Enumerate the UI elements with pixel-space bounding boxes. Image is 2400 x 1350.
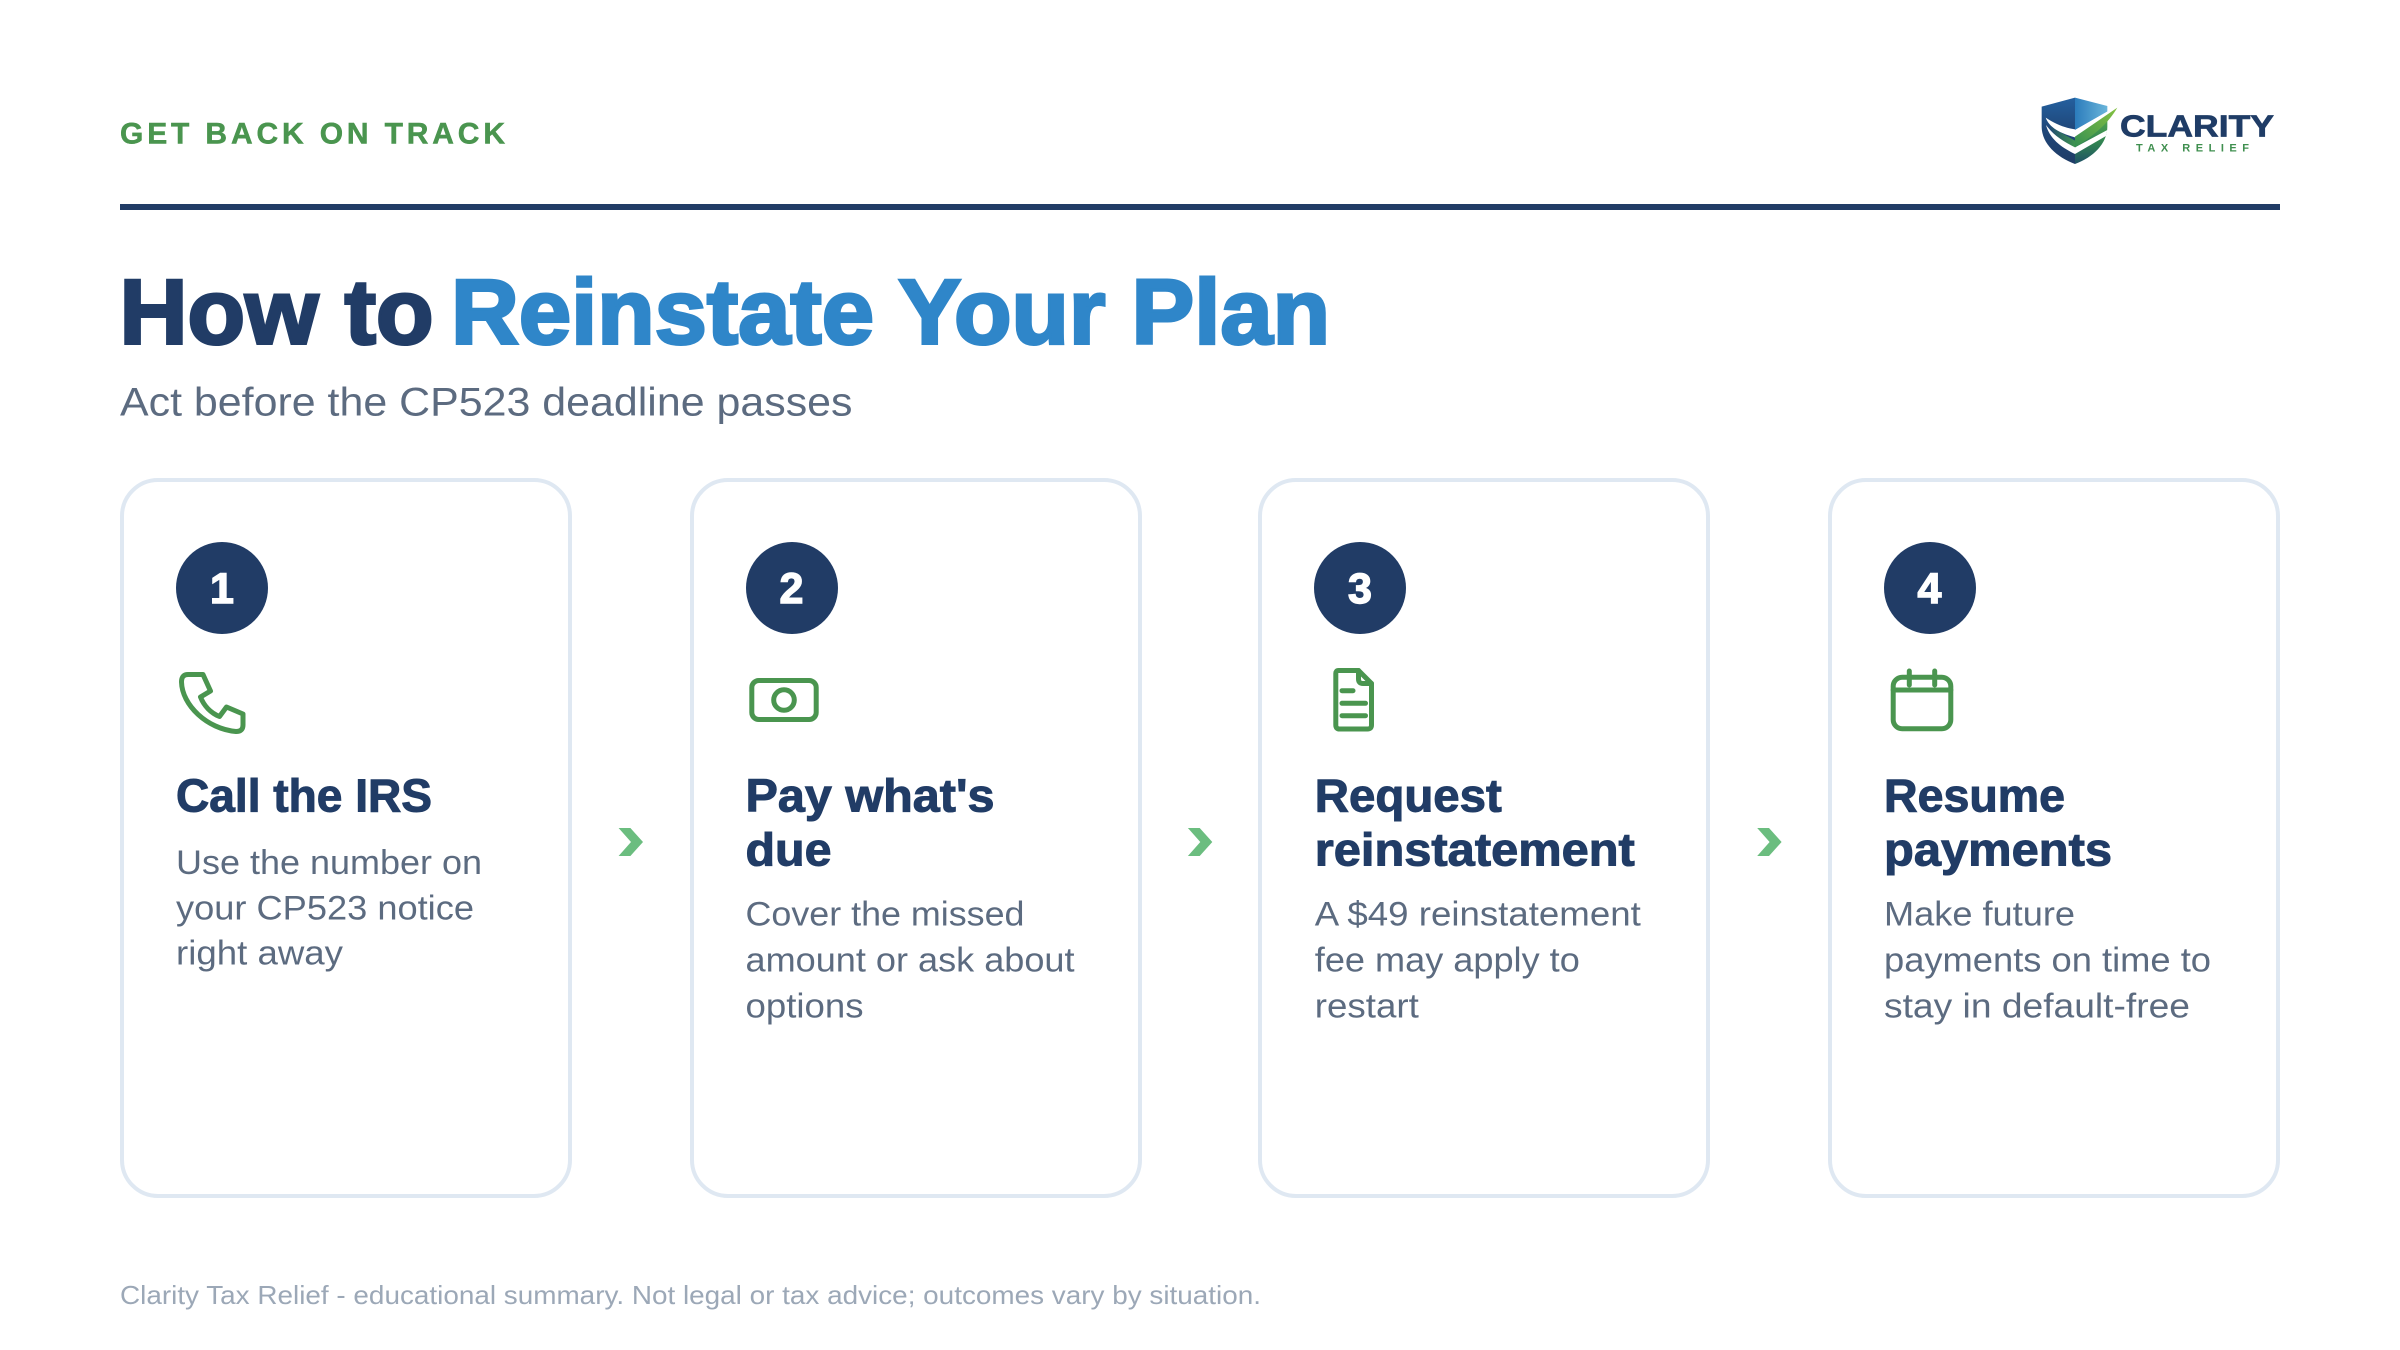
heading: payments [1884,824,2112,876]
body text: fee may apply to [1315,942,1580,980]
icon: document [1336,670,1372,729]
subtitle: Act before the CP523 deadline passes [120,381,852,425]
heading: Resume [1884,770,2065,822]
heading [746,770,994,876]
card outline [122,480,570,1196]
body text [176,844,482,972]
header rule [120,204,2280,210]
body text [746,896,1075,1025]
body text: amount or ask about [746,942,1075,980]
heading: Call the IRS [176,770,432,822]
body text: payments on time to [1884,942,2211,980]
number badge 1: 1 [210,565,234,613]
card outline [1260,480,1708,1196]
arrow 2 to 3 [1188,828,1212,856]
number badge 2: 2 [780,565,803,613]
panel: step 1 [122,480,570,1196]
title: How to [120,262,434,364]
icon: calendar [1893,671,1951,729]
body text: your CP523 notice [176,889,474,927]
icon: phone [182,674,243,732]
body text: stay in default-free [1884,987,2190,1025]
footer disclaimer: Clarity Tax Relief - educational summary. Not legal or tax advice; outcomes vary by situation. [120,1280,1261,1310]
number badge 4: 4 [1918,565,1942,613]
icon: banknote [752,680,816,720]
logo tagline: TAX RELIEF [2136,143,2249,155]
heading: Pay what's [746,770,994,822]
body text: A $49 reinstatement [1315,896,1641,934]
eyebrow label: GET BACK ON TRACK [120,118,505,150]
number badge 3 [1314,542,1406,634]
number badge 1 [176,542,268,634]
logo: Clarity Tax Relief [2042,98,2274,164]
body text: Use the number on [176,844,482,882]
heading [1884,770,2112,876]
card outline [1830,480,2278,1196]
body text: restart [1315,987,1419,1025]
logo wordmark: CLARITY [2120,109,2274,144]
number badge 3: 3 [1348,565,1372,613]
body text: Make future [1884,896,2075,934]
body text: right away [176,934,344,972]
heading [1315,770,1635,876]
panel: step 4 [1830,480,2278,1196]
body text: options [746,987,864,1025]
number badge 2 [746,542,838,634]
heading: reinstatement [1315,824,1635,876]
body text: Cover the missed [746,896,1024,934]
arrow 3 to 4 [1757,828,1782,856]
heading: due [746,824,832,876]
body text [1315,896,1641,1025]
icon: shield with check [2042,98,2117,164]
card outline [692,480,1140,1196]
title: Reinstate Your Plan [451,262,1330,364]
panel: step 3 [1260,480,1708,1196]
heading: Request [1315,770,1502,822]
body text [1884,896,2211,1025]
arrow 1 to 2 [619,828,643,856]
number badge 4 [1884,542,1976,634]
panel: step 2 [692,480,1140,1196]
